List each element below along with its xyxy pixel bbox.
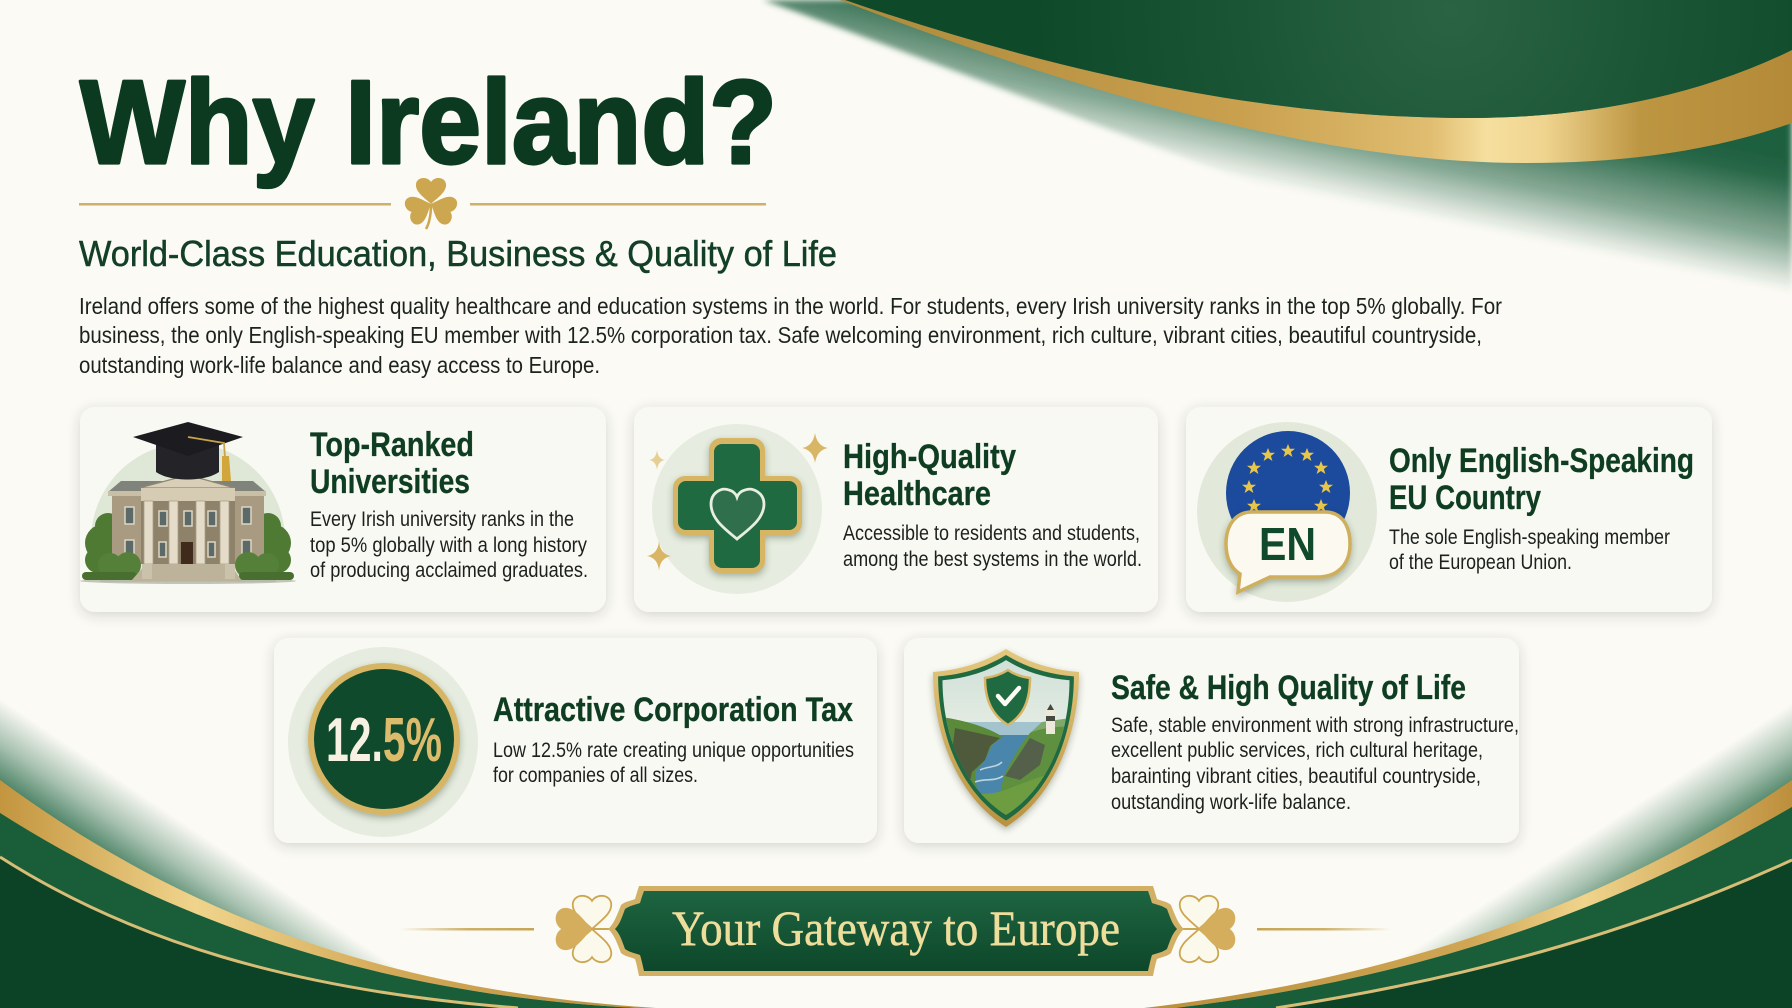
heading: Safe & High Quality of Life bbox=[1111, 669, 1466, 707]
icon: right shamrock bbox=[1179, 896, 1235, 962]
description: of the European Union. bbox=[1389, 551, 1572, 574]
icon: shield with coastal landscape bbox=[929, 649, 1083, 833]
title divider with shamrock bbox=[79, 178, 766, 229]
heading: Healthcare bbox=[843, 475, 991, 513]
heading bbox=[843, 438, 1016, 513]
heading: High-Quality bbox=[843, 438, 1016, 476]
description bbox=[1111, 714, 1519, 814]
top-right wave bbox=[763, 0, 1792, 293]
heading: Universities bbox=[310, 463, 470, 501]
description: Every Irish university ranks in the bbox=[310, 508, 574, 531]
intro paragraph: business, the only English-speaking EU member with 12.5% corporation tax. Safe welcoming environment, rich culture, vibrant cities, beautiful countryside, bbox=[79, 322, 1482, 348]
panel: top-ranked universities bbox=[80, 407, 606, 637]
icon: 12.5% coin bbox=[288, 647, 478, 837]
panel: attractive corporation tax bbox=[274, 638, 877, 843]
description: barainting vibrant cities, beautiful countryside, bbox=[1111, 765, 1481, 788]
heading bbox=[1389, 442, 1694, 517]
panel: safe and high quality of life bbox=[904, 638, 1519, 843]
description: among the best systems in the world. bbox=[843, 548, 1142, 571]
icon: medical cross with heart bbox=[647, 424, 828, 594]
icon: university building with graduation cap bbox=[80, 422, 296, 584]
description: Safe, stable environment with strong infrastructure, bbox=[1111, 714, 1519, 737]
icon: left shamrock bbox=[556, 896, 612, 962]
description: The sole English-speaking member bbox=[1389, 526, 1670, 549]
description: outstanding work-life balance. bbox=[1111, 791, 1351, 814]
panel: high-quality healthcare bbox=[634, 407, 1158, 612]
banner: your gateway to Europe: Your Gateway to Europe bbox=[672, 900, 1120, 956]
subtitle: World-Class Education, Business & Quality of Life bbox=[79, 233, 837, 274]
description: Accessible to residents and students, bbox=[843, 522, 1140, 545]
panel: only English-speaking EU country bbox=[1186, 407, 1712, 612]
banner: your gateway to Europe bbox=[400, 886, 1391, 976]
heading: Only English-Speaking bbox=[1389, 442, 1694, 480]
description: excellent public services, rich cultural heritage, bbox=[1111, 739, 1483, 762]
heading: Attractive Corporation Tax bbox=[493, 691, 853, 729]
intro paragraph: Ireland offers some of the highest quality healthcare and education systems in the world. For students, every Irish university ranks in the top 5% globally. For bbox=[79, 293, 1502, 319]
description bbox=[843, 522, 1142, 571]
icon: EU flag globe with EN speech bubble bbox=[1197, 422, 1377, 602]
icon: EU flag globe with EN speech bubble: EN bbox=[1259, 518, 1316, 570]
description bbox=[493, 739, 854, 787]
description: top 5% globally with a long history bbox=[310, 534, 587, 557]
bottom-right wave bbox=[1144, 640, 1792, 1008]
intro paragraph bbox=[79, 293, 1502, 378]
title: Why Ireland? bbox=[80, 56, 777, 189]
heading: Top-Ranked bbox=[310, 426, 474, 464]
description: for companies of all sizes. bbox=[493, 764, 698, 787]
heading: EU Country bbox=[1389, 479, 1541, 517]
intro paragraph: outstanding work-life balance and easy access to Europe. bbox=[79, 352, 600, 378]
description bbox=[1389, 526, 1670, 574]
banner side lines bbox=[400, 928, 1391, 930]
icon: 12.5% coin: 12.5% bbox=[326, 706, 442, 775]
description: of producing acclaimed graduates. bbox=[310, 559, 588, 582]
heading bbox=[310, 426, 474, 501]
bottom-left wave bbox=[0, 640, 660, 1008]
description: Low 12.5% rate creating unique opportunities bbox=[493, 739, 854, 762]
description bbox=[310, 508, 588, 582]
